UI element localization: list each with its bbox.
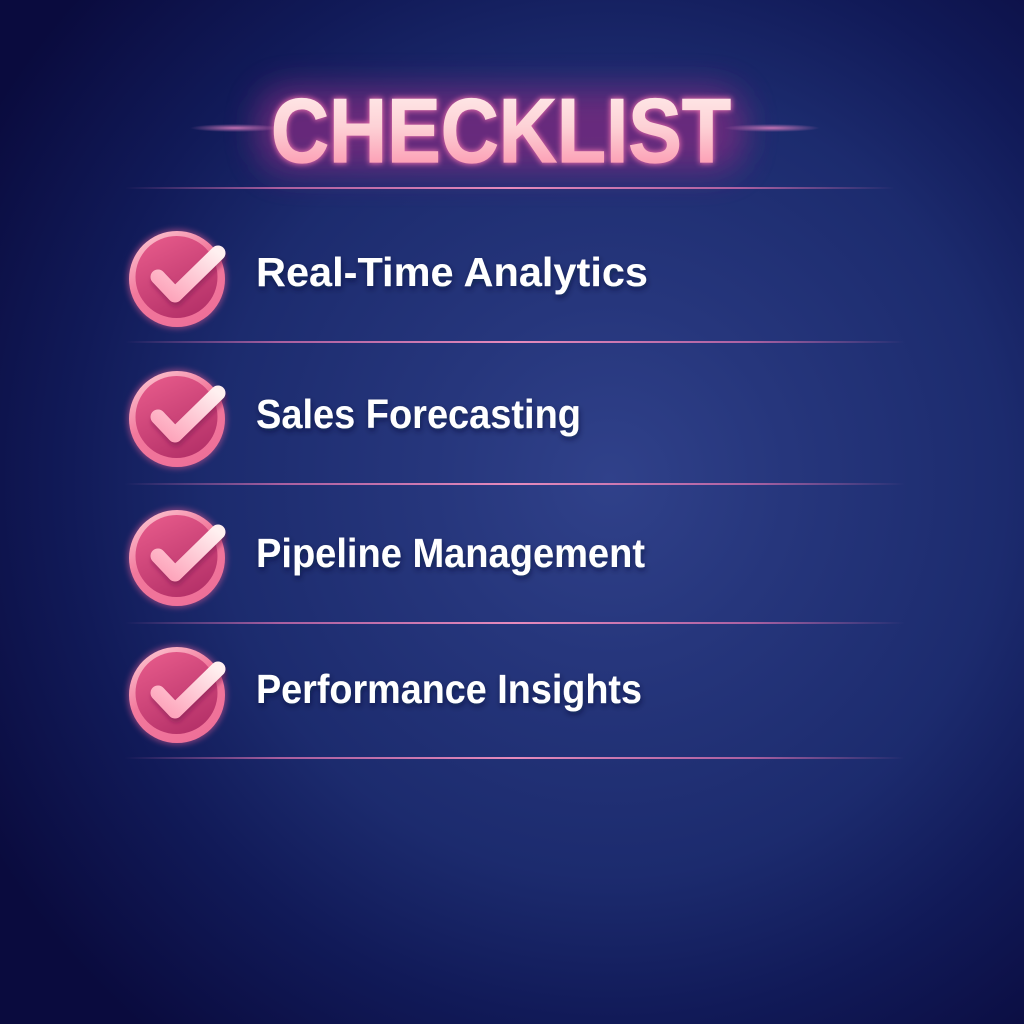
label: Performance Insights: Performance Insights xyxy=(256,666,642,712)
icon: check badge 4 xyxy=(127,645,227,745)
checklist item 4 xyxy=(127,645,642,745)
title with glow: CHECKLIST xyxy=(271,81,731,182)
title with glow: CHECKLIST xyxy=(271,81,731,182)
divider 3 xyxy=(125,622,905,624)
icon: check badge 2 xyxy=(127,369,227,469)
label: Real-Time Analytics: Real-Time Analytics xyxy=(256,249,648,295)
divider 4 xyxy=(125,757,905,759)
label: Pipeline Management: Pipeline Management xyxy=(256,530,645,576)
title divider xyxy=(125,187,895,189)
checklist item 2 xyxy=(127,369,581,469)
label: Sales Forecasting: Sales Forecasting xyxy=(256,391,581,437)
divider 2 xyxy=(125,483,905,485)
icon: check badge 1 xyxy=(127,229,227,329)
divider 1 xyxy=(125,341,905,343)
icon: check badge 3 xyxy=(127,508,227,608)
checklist item 3 xyxy=(127,508,645,608)
checklist item 1 xyxy=(127,229,648,329)
